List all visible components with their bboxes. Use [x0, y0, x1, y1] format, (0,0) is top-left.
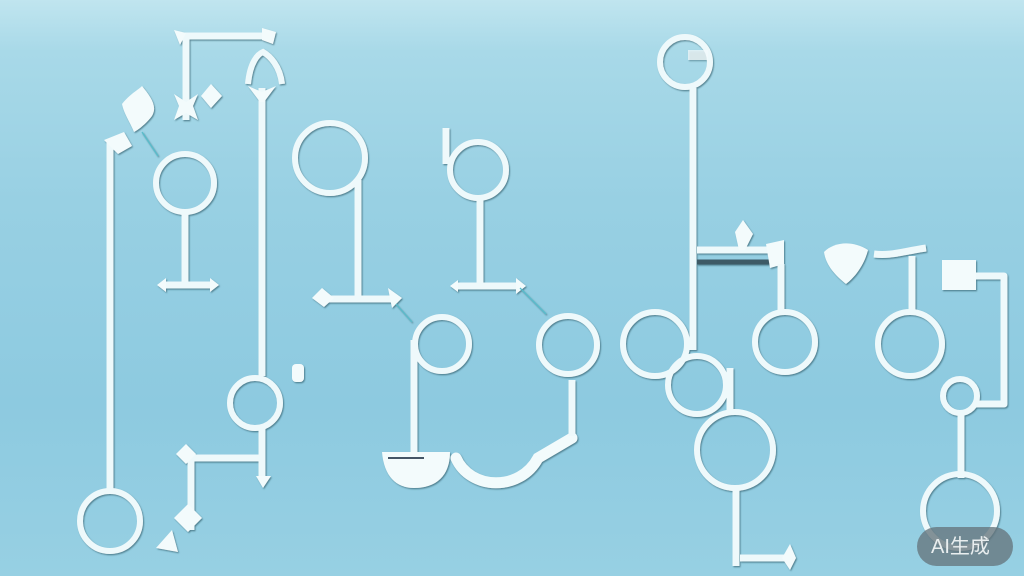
- branch with right drop: [697, 220, 784, 312]
- long vertical line with arch: [248, 52, 282, 376]
- top ring with long stem: [660, 37, 710, 350]
- top left bracket connector: [174, 28, 276, 120]
- overlapping ring: [668, 356, 726, 414]
- ring and bowl, centre: [382, 317, 469, 488]
- long left line with ring: [80, 132, 140, 551]
- right ring with stem: [874, 248, 942, 376]
- large lower ring with foot: [697, 368, 796, 570]
- curved connector, centre: [396, 288, 572, 483]
- ring with foot, upper left: [156, 154, 219, 292]
- right shield icon: [824, 243, 868, 284]
- ring, left of cluster: [623, 312, 687, 376]
- AI badge: [917, 527, 1013, 566]
- small ring and lower right ring: [923, 379, 997, 548]
- AI badge: AI生成: [931, 535, 990, 558]
- small ring with stem, lower left centre: [230, 378, 280, 488]
- ring, right of cluster: [755, 312, 815, 372]
- lower left branch: [156, 444, 262, 552]
- leaf shape and connector: [122, 86, 158, 156]
- small marker: [292, 364, 304, 382]
- ring with stem and foot, centre: [446, 128, 526, 294]
- box and far right bracket: [942, 260, 1004, 404]
- ring, centre right: [539, 316, 597, 374]
- ring with stem and foot, centre left: [295, 123, 402, 308]
